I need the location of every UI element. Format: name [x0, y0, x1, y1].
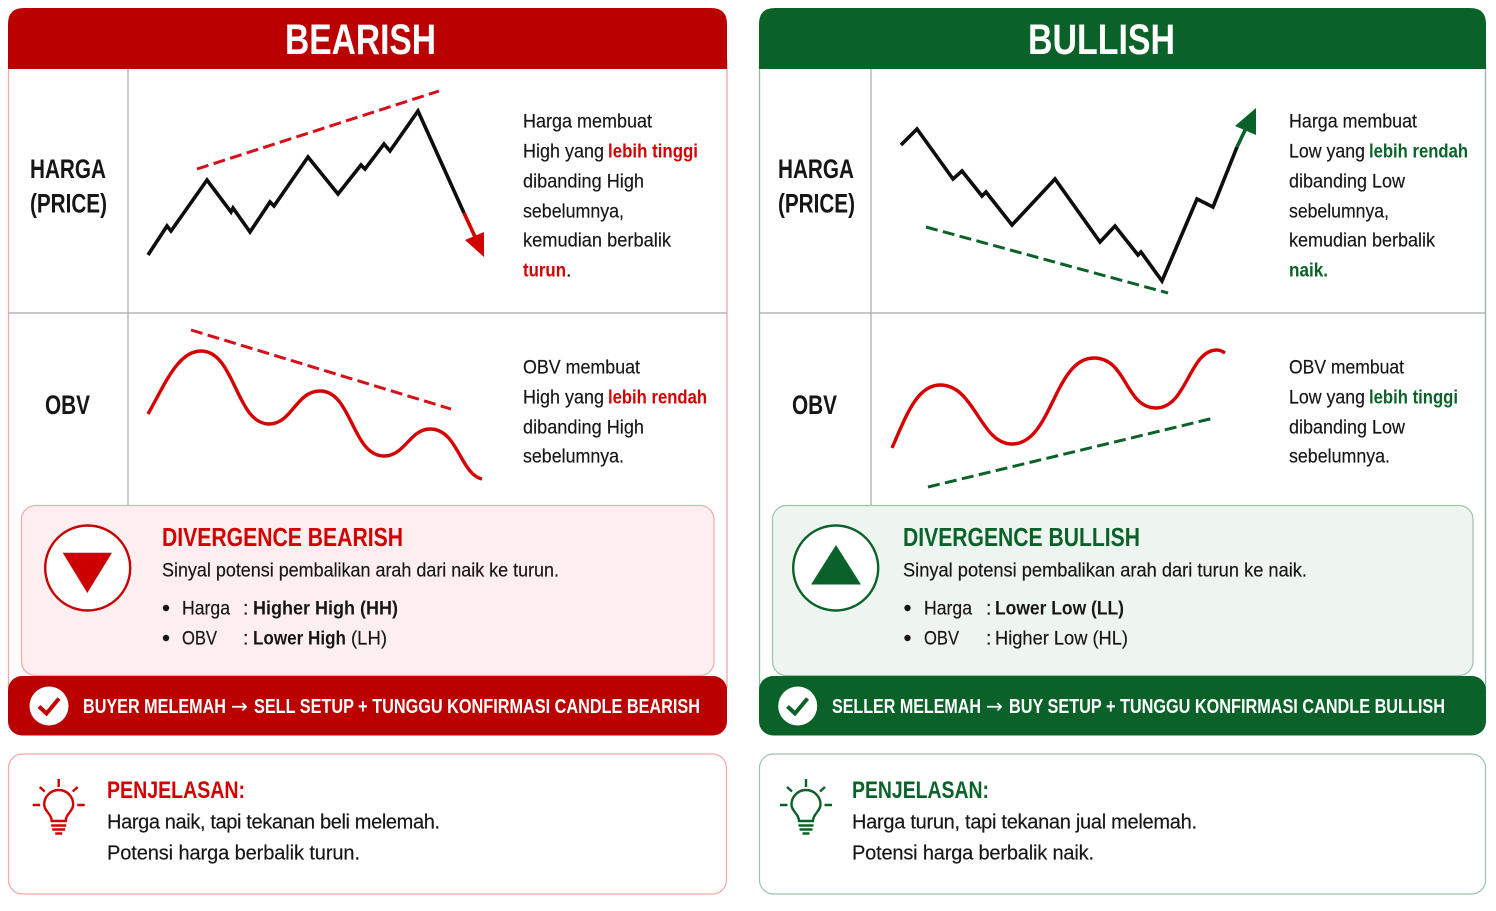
explanation text — [852, 812, 1197, 864]
banner text — [832, 694, 1445, 718]
text block: obv description: lebih rendah — [608, 386, 707, 408]
text block: price description: kemudian berbalik — [1289, 229, 1435, 251]
heading: bearish: BEARISH — [285, 16, 436, 64]
row label: harga price: (PRICE) — [30, 188, 107, 218]
text block: obv description: OBV membuat — [1289, 356, 1405, 378]
text block: obv description: dibanding High — [523, 416, 644, 438]
row label: harga price: HARGA — [30, 154, 106, 184]
list: harga and obv: : — [986, 627, 991, 649]
text block: price description: sebelumnya, — [523, 200, 624, 222]
text block: price description — [1289, 110, 1468, 281]
panel: bullish — [759, 8, 1486, 894]
chart: bearish price — [148, 91, 484, 257]
chart: bearish obv — [148, 330, 482, 479]
callout text: Sinyal potensi pembalikan arah dari naik ke turun. — [162, 560, 559, 582]
text block: obv description — [523, 356, 707, 467]
explanation heading: PENJELASAN: — [852, 777, 989, 804]
text block: price description: dibanding High — [523, 170, 644, 192]
panel: penjelasan bearish — [8, 754, 726, 894]
heading: bullish — [759, 8, 1486, 69]
text block: price description: sebelumnya, — [1289, 200, 1389, 222]
list: harga and obv: OBV — [182, 627, 217, 649]
panel frame: bullish table — [760, 60, 1486, 688]
explanation text — [107, 812, 440, 864]
callout: divergence bullish — [772, 506, 1473, 676]
list: harga and obv: OBV — [924, 627, 959, 649]
text block: obv description: OBV membuat — [523, 356, 641, 378]
icon: down triangle — [45, 526, 130, 610]
text block: price description: naik. — [1289, 259, 1328, 281]
text block: obv description: dibanding Low — [1289, 416, 1406, 438]
icon: light bulb — [780, 779, 832, 834]
text block: obv description — [1289, 356, 1458, 467]
text block: price description: lebih tinggi — [608, 140, 698, 162]
text block: price description: Harga membuat — [523, 110, 653, 132]
text block: price description: kemudian berbalik — [523, 229, 671, 251]
banner text — [83, 694, 700, 718]
banner text: → — [986, 694, 1003, 718]
banner: sell setup — [8, 676, 727, 736]
text block: price description: Harga membuat — [1289, 110, 1418, 132]
text block: price description — [523, 110, 698, 281]
list: harga and obv: Lower High — [253, 627, 346, 649]
explanation text: Harga naik, tapi tekanan beli melemah. — [107, 812, 440, 834]
row label: harga price: HARGA — [778, 154, 854, 184]
chart: bullish obv — [892, 350, 1225, 487]
banner text: BUYER MELEMAH — [83, 696, 226, 718]
text block: obv description: High yang — [523, 386, 604, 408]
row label: obv: OBV — [792, 390, 837, 420]
text block: obv description: lebih tinggi — [1369, 386, 1458, 408]
row label: harga price — [778, 154, 855, 218]
callout text: Sinyal potensi pembalikan arah dari turun ke naik. — [903, 560, 1307, 582]
text block: obv description: Low yang — [1289, 386, 1365, 408]
icon: light bulb — [33, 779, 85, 834]
list: harga and obv: Higher Low (HL) — [995, 627, 1128, 649]
text block: price description: turun — [523, 259, 566, 281]
row label: obv: OBV — [45, 390, 90, 420]
list: harga and obv — [163, 597, 398, 649]
icon: check — [778, 686, 817, 726]
list: harga and obv: (LH) — [351, 627, 387, 649]
explanation heading: PENJELASAN: — [107, 777, 245, 804]
callout heading: DIVERGENCE BEARISH — [162, 522, 403, 552]
row label: harga price — [30, 154, 107, 218]
panel: bearish — [8, 8, 727, 894]
list: harga and obv — [904, 597, 1128, 649]
banner: buy setup — [759, 676, 1486, 736]
list: harga and obv: Harga — [924, 597, 972, 619]
text block: price description: . — [566, 259, 571, 281]
text block: price description: High yang — [523, 140, 604, 162]
explanation text: Potensi harga berbalik turun. — [107, 842, 360, 864]
text block: obv description: sebelumnya. — [1289, 445, 1390, 467]
callout heading: DIVERGENCE BULLISH — [903, 522, 1140, 552]
callout: divergence bearish — [22, 506, 714, 676]
explanation text: Harga turun, tapi tekanan jual melemah. — [852, 812, 1197, 834]
list: harga and obv: : — [243, 627, 248, 649]
text block: price description: Low yang — [1289, 140, 1365, 162]
banner text: SELLER MELEMAH — [832, 696, 981, 718]
chart: bullish price — [901, 108, 1256, 293]
list: harga and obv: : — [986, 597, 991, 619]
text block: obv description: sebelumnya. — [523, 445, 624, 467]
heading: bullish: BULLISH — [1028, 16, 1175, 64]
banner text: → — [231, 694, 248, 718]
icon: up triangle — [793, 526, 878, 610]
explanation text: Potensi harga berbalik naik. — [852, 842, 1094, 864]
text block: price description: dibanding Low — [1289, 170, 1406, 192]
panel frame: bearish table — [8, 60, 727, 688]
heading: bearish — [8, 8, 727, 69]
list: harga and obv: : — [243, 597, 248, 619]
text block: price description: lebih rendah — [1369, 140, 1468, 162]
panel: penjelasan bullish — [760, 754, 1486, 894]
list: harga and obv: Harga — [182, 597, 230, 619]
icon: check — [30, 686, 68, 726]
list: harga and obv: Lower Low (LL) — [995, 597, 1124, 619]
list: harga and obv: Higher High (HH) — [253, 597, 398, 619]
row label: harga price: (PRICE) — [778, 188, 855, 218]
banner text: SELL SETUP + TUNGGU KONFIRMASI CANDLE BEARISH — [254, 696, 700, 718]
